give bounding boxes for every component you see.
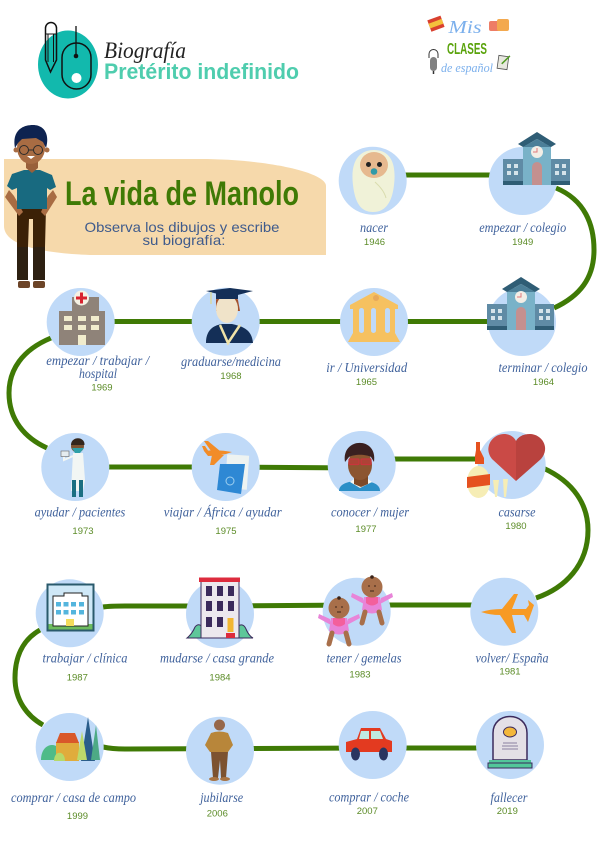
title: Biografía: Biografía bbox=[104, 38, 186, 63]
node: empezar trabajar hospital 1969: hospital bbox=[79, 366, 117, 381]
instructions bbox=[84, 219, 280, 248]
node: terminar colegio 1964 bbox=[487, 277, 588, 388]
label: ir / Universidad bbox=[326, 360, 407, 375]
node: viajar Africa ayudar 1975 bbox=[164, 433, 282, 537]
node: trabajar clínica 1987 bbox=[36, 579, 128, 684]
icon: old man bbox=[214, 720, 225, 730]
icon: glasses bbox=[493, 479, 508, 497]
icon: school bbox=[503, 132, 570, 185]
node: ir Universidad 1965 bbox=[326, 288, 408, 388]
header logo bbox=[38, 22, 98, 98]
icon: baby twin right bbox=[351, 575, 393, 623]
year: 1977 bbox=[355, 524, 377, 535]
title: La vida de Manolo: La vida de Manolo bbox=[65, 175, 299, 213]
icon: hospital bbox=[59, 297, 105, 345]
icon: school bbox=[487, 277, 554, 330]
timeline path bbox=[9, 175, 594, 749]
hair bbox=[14, 125, 47, 148]
icon: university bbox=[350, 292, 398, 309]
year: 2019 bbox=[497, 806, 518, 817]
node: fallecer 2019 bbox=[476, 711, 544, 817]
node: comprar casa de campo 1999 bbox=[11, 713, 136, 822]
icon: doctor bbox=[71, 453, 85, 491]
head bbox=[17, 132, 45, 164]
year: 1973 bbox=[72, 526, 94, 537]
node: nacer 1946 bbox=[339, 147, 407, 248]
node: conocer mujer 1977 bbox=[328, 431, 410, 535]
label: volver/ España bbox=[476, 651, 549, 666]
icon: baby twin left bbox=[318, 596, 360, 644]
icon: microphone bbox=[429, 50, 438, 58]
year: 1965 bbox=[356, 377, 377, 388]
year: 1975 bbox=[215, 526, 237, 537]
year: 1980 bbox=[505, 521, 527, 532]
label: ayudar / pacientes bbox=[35, 505, 125, 520]
icon: flag bbox=[427, 16, 445, 32]
icon: plane and passport bbox=[225, 454, 249, 490]
icon: notebook bbox=[497, 54, 510, 70]
year: 1949 bbox=[512, 237, 533, 248]
node: empezar colegio 1949 bbox=[479, 132, 570, 248]
icon: mouse bbox=[62, 43, 91, 89]
icon: plane bbox=[481, 594, 534, 633]
instructions: Observa los dibujos y escribe bbox=[84, 219, 280, 235]
label: empezar / colegio bbox=[479, 220, 566, 235]
logo disc bbox=[38, 30, 98, 98]
node: ayudar pacientes 1973 bbox=[35, 433, 125, 537]
node: graduarse medicina 1968 bbox=[181, 288, 281, 382]
node: mudarse casa grande 1984 bbox=[160, 578, 274, 684]
icon: apartment building bbox=[187, 625, 253, 638]
brand name: CLASES bbox=[447, 41, 487, 58]
icon: tombstone bbox=[493, 716, 527, 760]
node: casarse 1980 bbox=[467, 431, 546, 532]
node: empezar trabajar hospital 1969 bbox=[46, 288, 150, 394]
instructions: su biografía: bbox=[142, 232, 226, 248]
year: 1968 bbox=[220, 371, 242, 382]
icon: country house bbox=[41, 745, 63, 760]
node: volver España 1981 bbox=[470, 578, 549, 678]
year: 1981 bbox=[499, 667, 521, 678]
year: 2007 bbox=[357, 806, 378, 817]
smile bbox=[27, 156, 35, 159]
node: comprar coche 2007 bbox=[329, 711, 409, 817]
brand tagline: de español bbox=[441, 60, 493, 75]
figure: Manolo bbox=[5, 125, 57, 288]
brand logo bbox=[427, 16, 510, 75]
year: 1946 bbox=[364, 237, 385, 248]
label: fallecer bbox=[490, 790, 528, 805]
shoes bbox=[18, 281, 30, 288]
label: empezar / trabajar / bbox=[46, 353, 150, 368]
panel: title banner bbox=[4, 159, 326, 255]
year: 1983 bbox=[349, 670, 371, 681]
node: tener gemelas 1983 bbox=[318, 575, 402, 681]
glasses bbox=[20, 146, 28, 154]
year: 1999 bbox=[67, 811, 88, 822]
label: casarse bbox=[498, 505, 536, 520]
label: nacer bbox=[360, 220, 389, 235]
icon: woman bbox=[339, 481, 380, 491]
label: trabajar / clínica bbox=[42, 651, 128, 666]
year: 1984 bbox=[209, 673, 231, 684]
brand text: Mis bbox=[447, 17, 482, 37]
label: comprar / coche bbox=[329, 790, 409, 805]
label: jubilarse bbox=[198, 790, 243, 805]
icon: car bbox=[346, 728, 392, 752]
label: terminar / colegio bbox=[498, 360, 588, 375]
icon: heart bbox=[488, 434, 516, 481]
icon: clinic bbox=[48, 584, 94, 630]
label: conocer / mujer bbox=[331, 505, 410, 520]
icon: pencil bbox=[46, 22, 56, 72]
icon: bottle bbox=[467, 466, 490, 498]
icon: baby bbox=[352, 150, 395, 212]
node: jubilarse 2006 bbox=[186, 717, 254, 820]
trousers bbox=[17, 208, 46, 247]
label: comprar / casa de campo bbox=[11, 790, 136, 805]
label: viajar / África / ayudar bbox=[164, 505, 282, 520]
arms bbox=[5, 190, 57, 216]
icon: speech bubbles bbox=[489, 21, 502, 31]
label: graduarse/medicina bbox=[181, 354, 281, 369]
label: mudarse / casa grande bbox=[160, 651, 274, 666]
year: 1987 bbox=[67, 673, 88, 684]
year: 2006 bbox=[207, 809, 228, 820]
icon: graduate bbox=[216, 296, 240, 311]
shirt bbox=[7, 170, 56, 209]
neck bbox=[26, 160, 38, 173]
label: tener / gemelas bbox=[326, 651, 402, 666]
year: 1969 bbox=[91, 383, 113, 394]
year: 1964 bbox=[533, 377, 554, 388]
subtitle: Pretérito indefinido: Pretérito indefinido bbox=[104, 59, 299, 84]
